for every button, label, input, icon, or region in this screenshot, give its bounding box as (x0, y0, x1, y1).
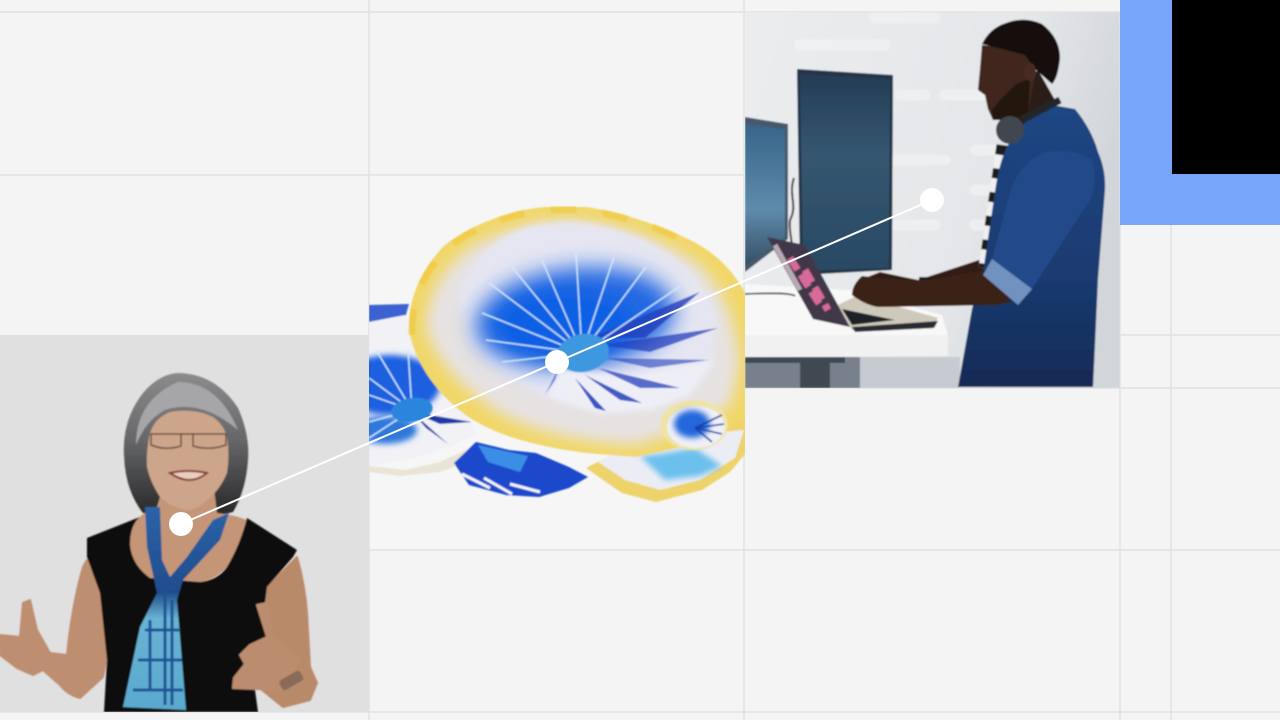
glasses (150, 434, 227, 448)
left arm and hand (0, 560, 107, 698)
pinwheel: left (369, 302, 472, 476)
neck and chest (129, 480, 247, 582)
pinwheel: bottom blue (454, 442, 588, 497)
secondary monitor (745, 117, 788, 272)
beard (992, 78, 1030, 120)
pinwheel: small lower right (660, 400, 728, 450)
near forearm (852, 270, 1012, 307)
hair (982, 20, 1060, 84)
pinwheel: main cream ring (426, 220, 738, 445)
scarf pattern (133, 590, 183, 705)
main monitor (797, 69, 893, 275)
pinwheel: main blue glow (470, 258, 680, 378)
sleeve (992, 151, 1095, 289)
node: photo (920, 188, 944, 212)
wall relief (970, 91, 996, 230)
panel: grey portrait background (0, 335, 369, 712)
smile (170, 471, 207, 480)
neck (1014, 70, 1056, 125)
headphones (996, 100, 1060, 144)
hair highlight (136, 382, 238, 445)
pinwheel: lower right (586, 420, 746, 502)
line: pinwheel to photo (557, 200, 932, 362)
right arm (262, 557, 317, 707)
pinwheel: main fold lines (482, 253, 679, 362)
cables (790, 178, 794, 270)
right hand (233, 603, 300, 690)
node: portrait (169, 512, 193, 536)
pinwheel: main blue core (497, 291, 633, 359)
black square (1172, 0, 1280, 174)
torso (958, 105, 1105, 387)
pinwheel: white lower petals (552, 368, 708, 412)
illustration: blue and yellow paper pinwheels (340, 207, 746, 502)
pinwheel: main rim teeth (412, 210, 688, 335)
photo: smiling woman presenting (0, 373, 317, 712)
pinwheel: main dark streaks (545, 292, 718, 411)
ear (1024, 63, 1036, 81)
far arm (868, 259, 985, 282)
panel: blue and black corner block (1120, 0, 1280, 225)
undershirt stripes (984, 145, 1002, 268)
developer (852, 20, 1105, 387)
desk (745, 284, 960, 388)
node: pinwheel (545, 350, 569, 374)
face (147, 411, 228, 510)
photo: developer at standing desk (745, 12, 1120, 388)
watch (918, 276, 930, 281)
scarf (123, 507, 229, 710)
hair (124, 373, 248, 520)
pinwheel: main yellow rim (409, 207, 746, 457)
connector lines and nodes (169, 188, 944, 536)
wall (745, 12, 1120, 388)
rolled cuff (983, 259, 1032, 305)
line: portrait to pinwheel (181, 362, 557, 524)
laptop (767, 237, 938, 332)
pinwheel: main hub (558, 332, 610, 374)
watch (278, 670, 304, 691)
pinwheel: main pleated disc (459, 222, 716, 413)
face (978, 45, 1036, 120)
black top (87, 517, 297, 712)
